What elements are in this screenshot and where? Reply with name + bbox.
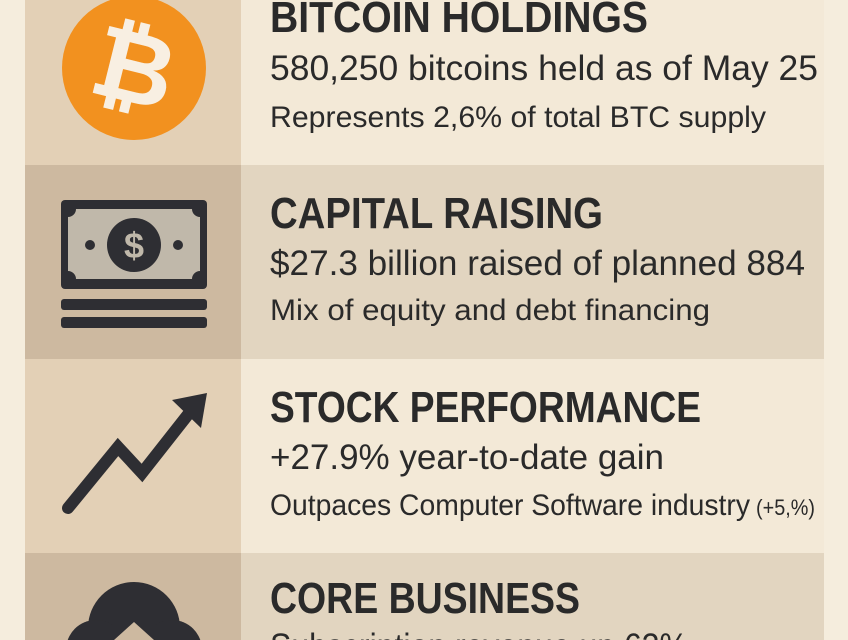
icon: cloud bbox=[66, 582, 202, 640]
text: ytd gain: +27.9% year-to-date gain bbox=[270, 438, 664, 477]
panel: capital raising bbox=[25, 165, 824, 359]
icon: bitcoin bbox=[62, 0, 206, 140]
text: supply share: Represents 2,6% of total BTC supply bbox=[270, 101, 766, 134]
text: financing mix: Mix of equity and debt financing bbox=[270, 294, 710, 327]
heading: stock performance: STOCK PERFORMANCE bbox=[270, 383, 701, 432]
heading: core business: CORE BUSINESS bbox=[270, 574, 580, 623]
icon: money stack bbox=[61, 200, 207, 328]
text: holdings detail: 580,250 bitcoins held as of May 25 bbox=[270, 49, 818, 88]
text: amount raised: $27.3 billion raised of planned 884 bbox=[270, 244, 805, 283]
icon: bitcoin: ₿ bbox=[81, 4, 187, 132]
text: industry comparison: Outpaces Computer Software industry bbox=[270, 489, 750, 522]
heading: capital raising: CAPITAL RAISING bbox=[270, 189, 603, 238]
panel: core business bbox=[25, 553, 824, 640]
icon: money stack: $ bbox=[124, 225, 144, 266]
panel: bitcoin holdings bbox=[25, 0, 824, 165]
icon: rising arrow bbox=[68, 393, 207, 508]
panel: stock performance bbox=[25, 359, 824, 553]
text: industry figure: (+5,%) bbox=[756, 495, 815, 520]
